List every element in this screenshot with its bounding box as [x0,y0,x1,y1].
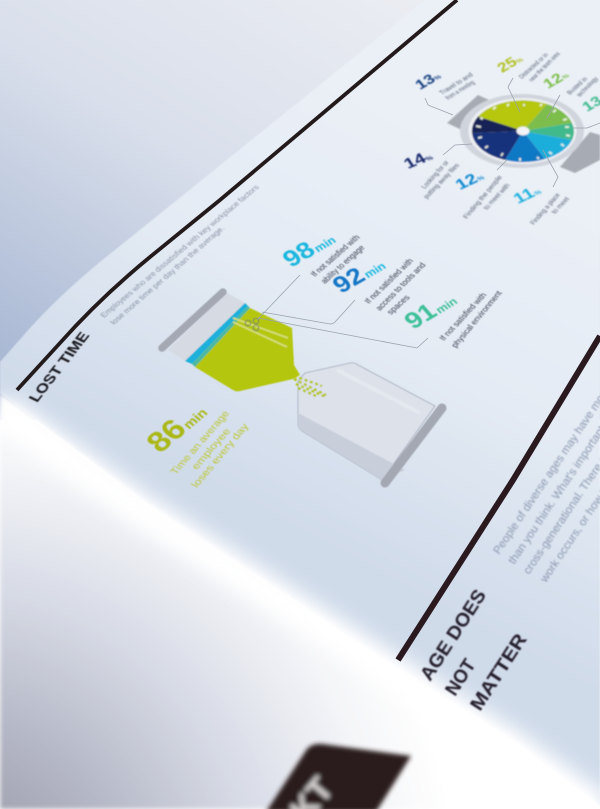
label: 12 percent blue: Finding the people [462,175,504,220]
label: 11 percent [510,182,571,226]
lower cap [385,408,442,483]
outer ring [460,94,584,168]
label: 25 percent: 25% [494,51,526,76]
clock hub [516,126,530,136]
hourglass chart [162,292,442,483]
left strap [447,95,489,130]
teal water band [192,306,250,367]
label: 25 percent [494,51,562,83]
foreground white sheet [0,393,600,809]
callout: 91 min: If not satisfied with [437,291,489,342]
label: 11 percent: to meet [551,196,571,215]
section rule: age does not matter [398,336,600,660]
bright edge glow [0,410,600,809]
label: 13 percent navy [412,68,477,101]
label: 14 percent: putting away files [423,162,462,200]
upper cap [162,292,223,348]
callout: 98 min: ability to engage [318,243,367,285]
label: 12 percent green: Busted in [566,76,590,96]
label: 11 percent: Finding a place [529,192,562,226]
callout: 91 min: physical environment [449,289,504,349]
label: 12 percent blue: 12% [452,168,487,193]
callout: 86 min: Time an average [169,409,233,476]
callout: 86 min: loses every day [190,422,253,489]
wedge: 13 percent teal [523,123,574,140]
label: 13 percent navy: from a meeting [444,79,477,101]
right strap [560,132,600,173]
callout: 98 min: If not satisfied with [308,233,362,278]
wedge: 12 percent blue [505,131,545,162]
clock chart [447,94,600,173]
label: 14 percent: Looking for or [420,159,451,190]
label: 14 percent: 14% [400,148,436,172]
label: 12 percent blue [452,168,512,220]
callout: 86 min: employee [190,427,234,471]
callout: 92 min [328,252,428,316]
glass highlights [233,318,288,347]
leader lines: clock [425,78,600,187]
callout: 92 min: 92min [328,252,390,298]
wedge: 13 percent dark navy [472,116,523,133]
label: 25 percent: near the team area [528,51,562,83]
inner ring [468,98,576,164]
callout: 92 min: spaces [384,293,412,316]
heading: lost time: LOST TIME [25,329,93,404]
background wall [0,0,600,420]
leader lines: hourglass [257,275,428,348]
label: 12 percent blue: to meet with [483,183,512,211]
green fill [195,308,300,391]
intro text: lost time: lose more time per day than the average. [108,225,227,326]
callout: 98 min: 98min [278,226,340,272]
heading: age does not matter: NOT [442,655,481,700]
black page tab [266,744,411,809]
label: 25 percent: Distracted or in [518,52,551,80]
falling sand dots [294,376,326,397]
section rule: lost time [17,0,457,390]
clock labels [400,51,600,226]
heading: age does not matter [417,586,532,715]
heading: age does not matter: MATTER [467,630,532,715]
wedge: 11 percent light blue [523,131,572,159]
lower bulb [298,363,435,480]
label: 12 percent green: 12% [540,67,572,92]
wedge: 25 percent [478,100,547,131]
upper glass [168,293,245,361]
callout: 98 min [278,226,367,285]
blue water band [185,303,248,364]
callout: 92 min: If not satisfied with [362,257,415,305]
label: 12 percent green [540,67,600,98]
wedge: 14 percent navy [472,131,523,160]
wedge: 12 percent green [523,104,572,131]
lower bulb shading [298,413,405,480]
label: 14 percent [400,148,462,200]
heading: age does not matter: AGE DOES [417,586,491,685]
callout: 92 min: access to tools and [373,261,428,312]
callout: 86 min: 86min [139,395,214,458]
label: 11 percent: 11% [510,182,544,207]
intro text: lost time: Employees who are dissatisfied with key workplace factors [98,183,261,319]
callout: 91 min [399,287,504,349]
label: 13 percent navy: Travel to and [438,72,475,96]
callout: 86 min [139,395,253,489]
label: 13 percent navy: 13% [412,68,444,93]
marker circles [245,318,259,331]
callout: 91 min: 91min [399,287,462,334]
lower bulb highlight [337,370,420,413]
clock ticks [476,104,570,161]
